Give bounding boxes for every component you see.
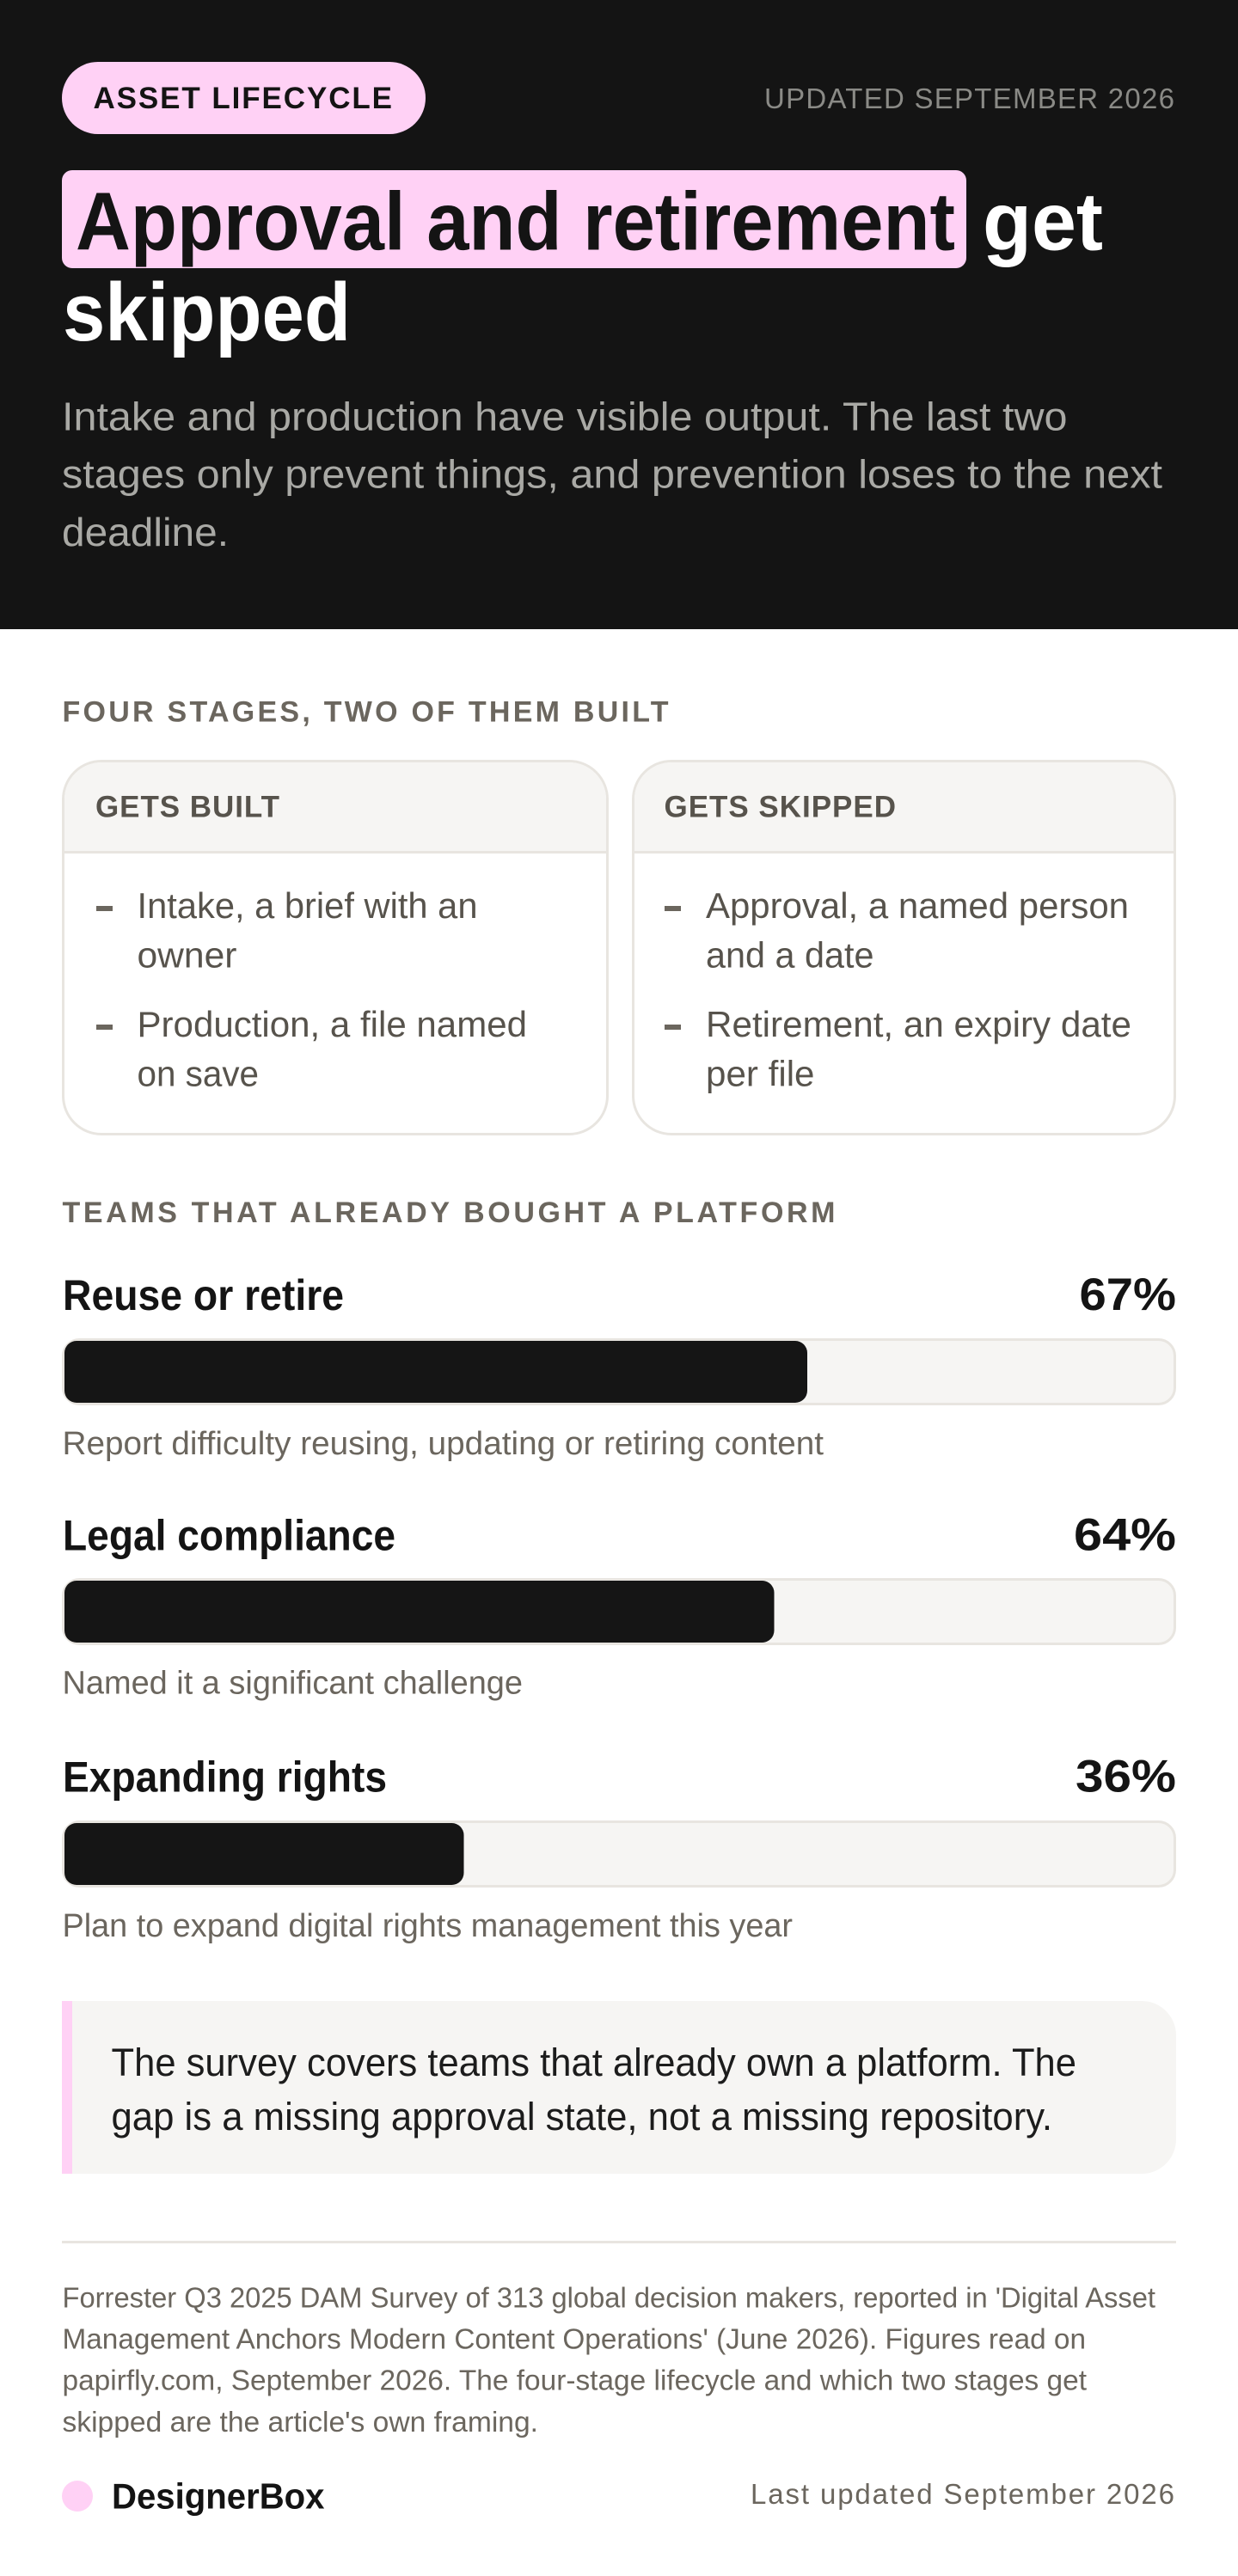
callout: gap is a missing approval state, not a missing repository.	[112, 2095, 1052, 2139]
callout	[62, 2001, 1176, 2174]
bar: legal compliance 64%: 64%	[1074, 1509, 1176, 1560]
callout: The survey covers teams that already own a platform. The	[112, 2041, 1076, 2084]
title: skipped	[63, 266, 351, 358]
bar: expanding rights 36%: Plan to expand digital rights management this year	[62, 1908, 793, 1944]
subtitle: Intake and production have visible output. The last two	[62, 394, 1067, 438]
list item: approval: Approval, a named person	[706, 885, 1129, 926]
list item: production: Production, a file named	[138, 1004, 527, 1044]
panel: header	[0, 0, 1238, 629]
list item: approval: and a date	[706, 935, 873, 975]
list item: intake: owner	[138, 935, 237, 975]
tag pill: asset lifecycle	[62, 62, 426, 134]
card heading: GETS BUILT	[95, 791, 279, 823]
source note: papirfly.com, September 2026. The four-stage lifecycle and which two stages get	[62, 2365, 1087, 2396]
section heading: teams: TEAMS THAT ALREADY BOUGHT A PLATFORM	[62, 1196, 835, 1229]
updated date: UPDATED SEPTEMBER 2026	[764, 83, 1174, 114]
bar: reuse or retire 67%: Reuse or retire	[63, 1271, 344, 1319]
title	[62, 170, 1103, 358]
panel: gets built	[64, 762, 607, 1135]
list item: intake	[96, 885, 478, 975]
bar: expanding rights 36%: 36%	[1076, 1752, 1176, 1802]
footer date: Last updated September 2026	[751, 2478, 1174, 2510]
list item: intake: Intake, a brief with an	[138, 885, 478, 926]
bar: expanding rights 36%	[62, 1752, 1176, 1944]
bar: expanding rights 36%: Expanding rights	[63, 1753, 387, 1802]
source note	[62, 2281, 1155, 2438]
list item: retirement: Retirement, an expiry date	[706, 1004, 1131, 1044]
subtitle	[62, 394, 1162, 554]
source note: skipped are the article's own framing.	[62, 2406, 538, 2438]
bar: reuse or retire 67%: Report difficulty reusing, updating or retiring content	[62, 1426, 824, 1462]
list item: production: on save	[138, 1054, 259, 1093]
subtitle: deadline.	[62, 510, 229, 554]
brand: DesignerBox: DesignerBox	[112, 2475, 325, 2516]
list item: retirement: per file	[706, 1054, 815, 1093]
subtitle: stages only prevent things, and prevention loses to the next	[62, 452, 1162, 497]
bar: legal compliance 64%: Named it a significant challenge	[62, 1666, 523, 1702]
panel: gets skipped	[633, 762, 1174, 1135]
bar: reuse or retire 67%: 67%	[1080, 1270, 1176, 1320]
card heading: GETS SKIPPED	[664, 791, 896, 823]
bar: legal compliance 64%: Legal compliance	[63, 1511, 395, 1559]
title: Approval and retirement	[76, 176, 955, 268]
list item: retirement	[665, 1004, 1131, 1093]
bar: reuse or retire 67%	[62, 1270, 1176, 1462]
tag pill: asset lifecycle: ASSET LIFECYCLE	[93, 82, 392, 115]
list item: approval	[665, 885, 1129, 975]
source note: Forrester Q3 2025 DAM Survey of 313 global decision makers, reported in 'Digital Asset	[62, 2281, 1155, 2313]
list item: production	[96, 1004, 527, 1093]
title: get	[983, 176, 1103, 268]
source note: Management Anchors Modern Content Operations' (June 2026). Figures read on	[62, 2322, 1086, 2355]
section heading: four stages: FOUR STAGES, TWO OF THEM BUILT	[62, 695, 669, 728]
bar: legal compliance 64%	[62, 1509, 1176, 1702]
